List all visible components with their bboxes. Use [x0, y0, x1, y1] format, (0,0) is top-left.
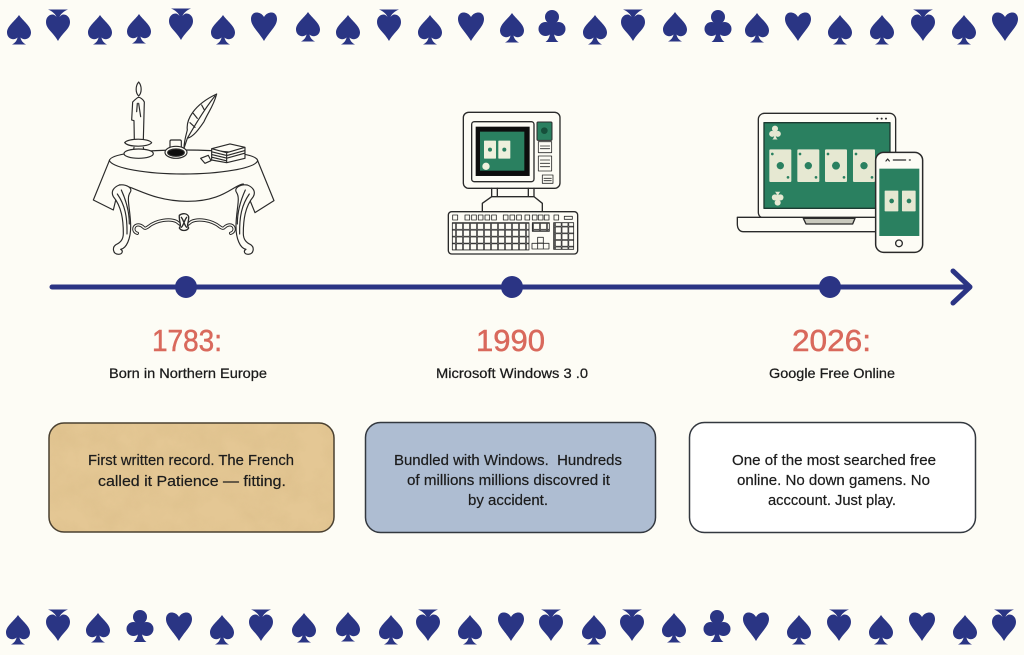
laptop lid: [758, 113, 896, 218]
quill feather: [184, 94, 217, 148]
timeline marker 2026: [819, 276, 841, 298]
white card text: [732, 453, 936, 509]
blue card text: Bundled with Windows. Hundreds: [394, 453, 622, 469]
phone body: [876, 152, 923, 252]
phone speaker and camera: [886, 159, 910, 161]
loose paper: [201, 155, 211, 163]
parchment card text: First written record. The French: [88, 453, 294, 469]
blue card text: [394, 453, 622, 509]
laptop base: [737, 217, 878, 232]
monitor screen: [476, 127, 530, 176]
stack of letters: [212, 144, 245, 163]
monitor bezel: [472, 122, 534, 182]
camera dots: [876, 118, 887, 120]
year 1783: 1783:: [152, 323, 222, 358]
phone cards: [885, 191, 916, 211]
top border of card suits: [7, 8, 1018, 44]
monitor stand: [482, 188, 542, 212]
phone home button: [896, 240, 902, 247]
caption: born in northern europe: Born in Northern Europe: [109, 365, 267, 381]
timeline marker 1990: [501, 276, 523, 298]
caption: google free online: Google Free Online: [769, 365, 895, 381]
phone screen: [879, 169, 919, 236]
laptop cards: [769, 149, 875, 182]
screen clubs: [769, 126, 784, 206]
stretcher ornament: [134, 214, 234, 233]
laptop screen: [764, 123, 890, 208]
icon: desktop computer with solitaire: [448, 112, 578, 254]
candle holder: [125, 139, 152, 152]
timeline line: [52, 284, 968, 290]
inkwell: [170, 140, 181, 149]
panel: blue card: [366, 422, 656, 532]
laptop card pips: [771, 153, 873, 179]
table edge: [109, 161, 258, 174]
left leg: [112, 185, 131, 254]
white card text: online. No down gamens. No: [737, 473, 930, 489]
caption: microsoft windows: Microsoft Windows 3 .0: [436, 365, 588, 381]
white card text: One of the most searched free: [732, 453, 936, 469]
phone card pips: [889, 199, 911, 203]
panel: white card: [690, 422, 976, 532]
keyboard: [448, 212, 578, 254]
icon: laptop and phone with solitaire: [737, 113, 923, 252]
blue card text: of millions millions discovred it: [407, 473, 610, 489]
parchment card text: [88, 453, 294, 490]
trackpad notch: [803, 218, 855, 224]
year 2026: 2026:: [792, 323, 871, 358]
blue card text: by accident.: [468, 493, 548, 509]
candle: [132, 97, 144, 140]
timeline arrowhead: [953, 271, 970, 303]
monitor cards: [482, 141, 510, 170]
icon: writing table with candle, inkwell and quill: [93, 82, 274, 254]
white card text: acccount. Just play.: [768, 493, 896, 509]
candle flame: [136, 82, 141, 96]
side panel: [537, 122, 553, 183]
panel: parchment card: [49, 423, 334, 532]
year 1990: 1990: [476, 323, 545, 358]
card pips: [488, 148, 506, 152]
monitor case: [463, 112, 560, 188]
right leg: [236, 185, 254, 254]
timeline marker 1783: [175, 276, 197, 298]
bottom border of card suits: [6, 610, 1016, 644]
green game area: [480, 132, 524, 171]
parchment card text: called it Patience — fitting.: [98, 474, 286, 490]
tablecloth: [93, 150, 274, 213]
